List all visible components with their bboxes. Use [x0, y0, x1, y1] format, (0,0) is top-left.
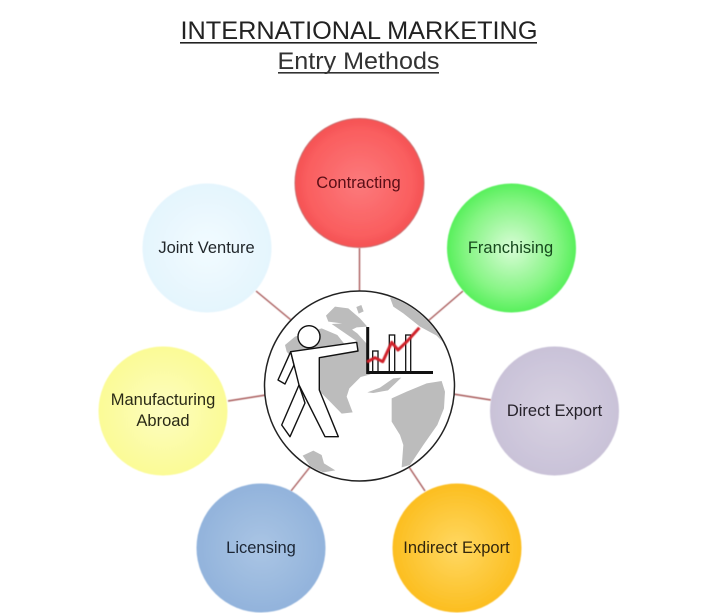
globe with figure and chart: [264, 291, 454, 481]
title: [180, 17, 538, 75]
node: Manufacturing Abroad: Abroad: [136, 412, 190, 430]
continents: [285, 298, 451, 472]
node: Licensing: [196, 484, 326, 612]
node: Contracting: Contracting: [316, 174, 401, 192]
node: Joint Venture: Joint Venture: [158, 239, 255, 257]
node: Joint Venture: [142, 184, 272, 312]
node: Manufacturing Abroad: [98, 346, 228, 476]
node: Franchising: Franchising: [468, 239, 553, 257]
title: INTERNATIONAL MARKETING: [180, 17, 538, 45]
node: Direct Export: [490, 346, 619, 476]
node: Licensing: Licensing: [226, 539, 296, 557]
node: Indirect Export: [392, 484, 522, 612]
connector lines: [228, 248, 491, 491]
node: Contracting: [295, 118, 424, 248]
node: Direct Export: Direct Export: [507, 402, 603, 420]
title: Entry Methods: [278, 48, 440, 75]
node: Franchising: [447, 184, 576, 312]
node: Manufacturing Abroad: Manufacturing: [111, 391, 215, 409]
icon: bar chart with trend line: [367, 327, 433, 373]
node: Indirect Export: Indirect Export: [403, 539, 510, 557]
icon: walking figure: [278, 326, 358, 437]
